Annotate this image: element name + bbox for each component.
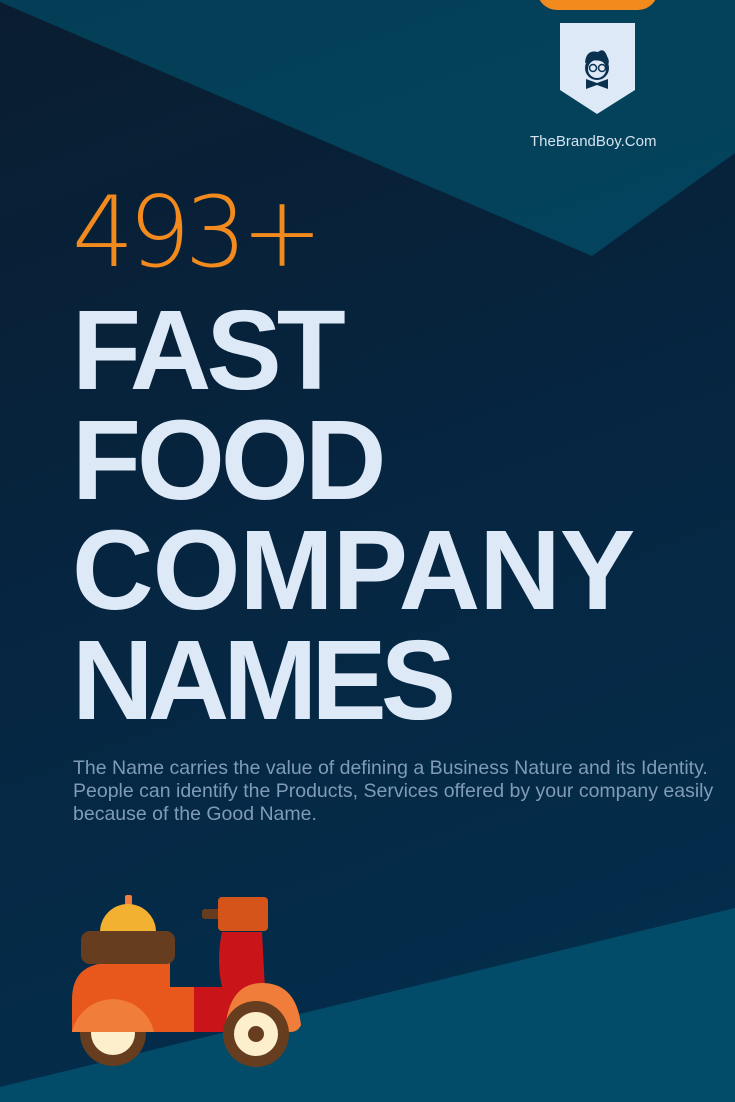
title: FAST xyxy=(72,287,341,413)
title xyxy=(72,287,634,743)
description: The Name carries the value of defining a Business Nature and its Identity. xyxy=(73,757,708,779)
brand text: TheBrandBoy.Com xyxy=(530,133,656,150)
title: NAMES xyxy=(72,617,450,743)
number 493+: 493+ xyxy=(72,176,317,290)
description: People can identify the Products, Services offered by your company easily xyxy=(73,780,713,802)
title: COMPANY xyxy=(72,507,634,633)
logo badge xyxy=(560,23,635,114)
description xyxy=(73,757,714,825)
orange pill xyxy=(537,0,658,10)
icon: scooter xyxy=(72,895,301,1067)
title: FOOD xyxy=(72,397,382,523)
description: because of the Good Name. xyxy=(73,803,317,825)
